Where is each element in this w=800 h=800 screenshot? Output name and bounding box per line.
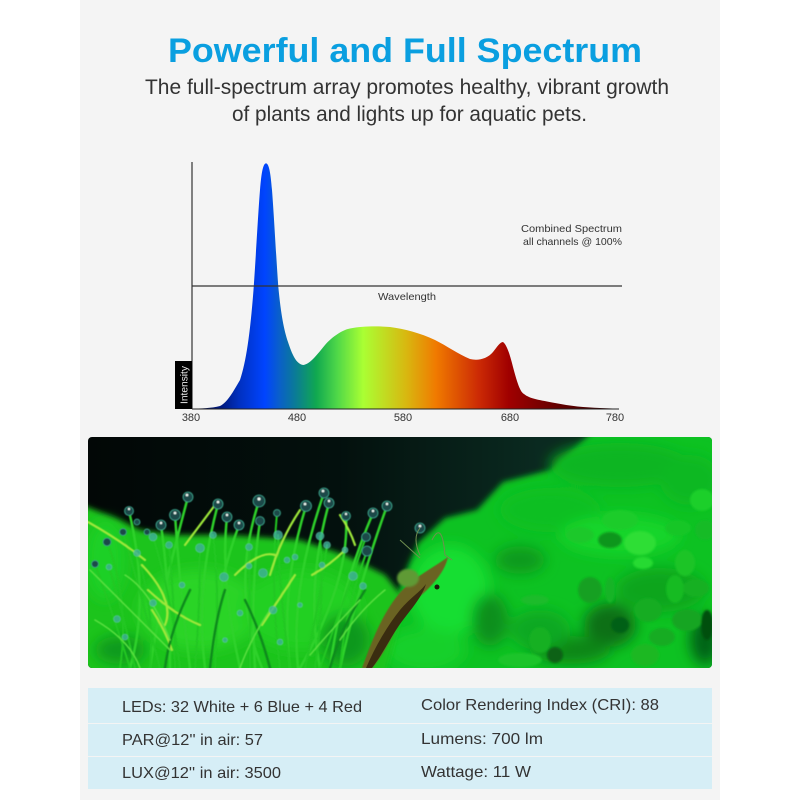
plant stems <box>88 493 387 668</box>
wavelength tick labels: 380 <box>182 412 200 424</box>
y axis <box>191 162 193 409</box>
subtitle text <box>145 76 669 126</box>
intensity label: Intensity <box>180 366 190 404</box>
spectrum note <box>521 223 622 248</box>
table row 2: Lumens: 700 lm <box>421 731 543 748</box>
wavelength tick labels: 680 <box>501 412 519 424</box>
table row 3: LUX@12'' in air: 3500 <box>122 765 281 782</box>
table row 1 <box>88 688 712 723</box>
spec table <box>88 688 712 789</box>
subtitle text: of plants and lights up for aquatic pets. <box>232 103 587 126</box>
photo: aquatic plants and shrimp <box>82 430 720 675</box>
title: Powerful and Full Spectrum <box>168 32 642 70</box>
spectrum note: Combined Spectrum <box>521 223 622 235</box>
intensity label <box>175 361 192 409</box>
table row 3: Wattage: 11 W <box>421 764 532 781</box>
left plant mass <box>82 488 425 675</box>
table row 1: Color Rendering Index (CRI): 88 <box>421 697 659 714</box>
table row 2 <box>88 724 712 756</box>
panel: page background <box>80 0 720 800</box>
spectrum note: all channels @ 100% <box>523 236 622 248</box>
background moss right <box>375 430 720 675</box>
spectrum curve <box>192 163 619 409</box>
wavelength tick labels: 780 <box>606 412 624 424</box>
x axis baseline <box>192 408 619 410</box>
wavelength tick labels: 480 <box>288 412 306 424</box>
water bubbles <box>92 488 425 645</box>
shrimp <box>362 528 452 668</box>
wavelength axis line <box>192 285 622 287</box>
table row 1: LEDs: 32 White + 6 Blue + 4 Red <box>122 699 362 716</box>
table row 2: PAR@12'' in air: 57 <box>122 732 263 749</box>
subtitle text: The full-spectrum array promotes healthy, vibrant growth <box>145 76 669 99</box>
table row 3 <box>88 757 712 789</box>
wavelength label: Wavelength <box>378 291 436 303</box>
spectrum chart <box>175 162 624 424</box>
wavelength tick labels: 580 <box>394 412 412 424</box>
wavelength tick labels <box>182 412 624 424</box>
